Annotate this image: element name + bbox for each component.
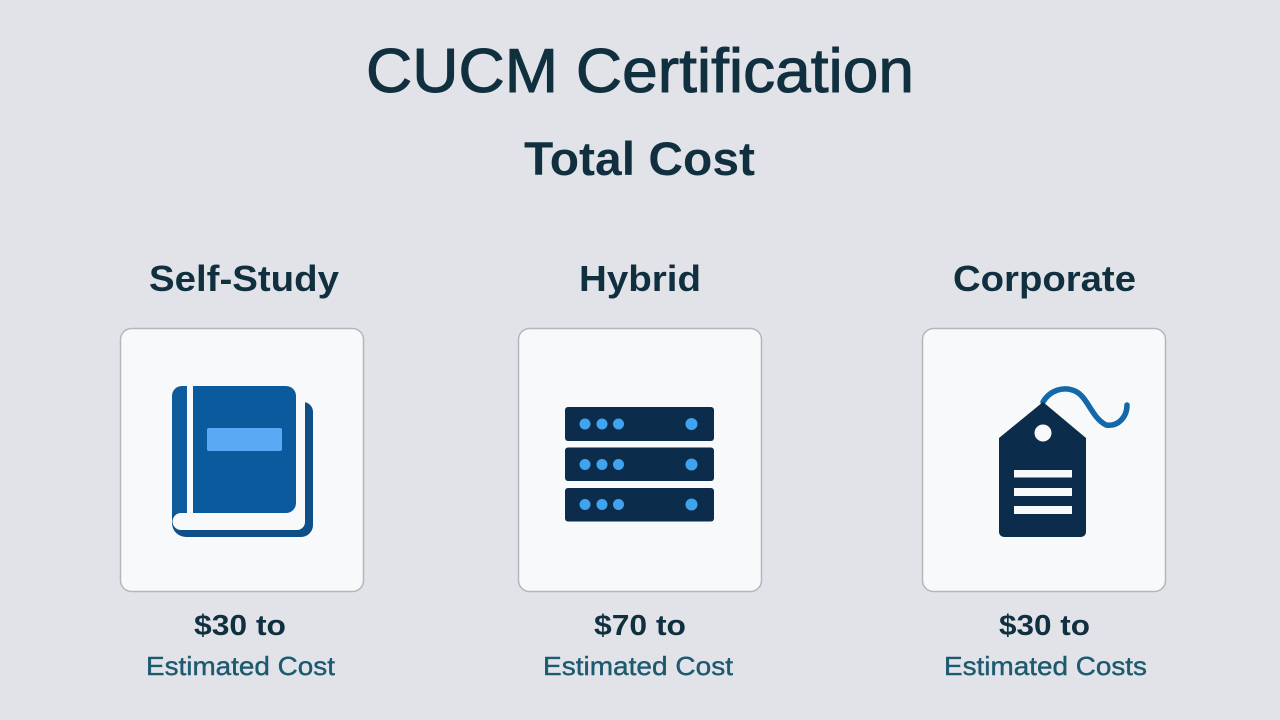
price: corporate: $30 to bbox=[999, 610, 1090, 642]
panel: hybrid bbox=[518, 258, 762, 681]
caption: hybrid: Estimated Cost bbox=[543, 651, 734, 681]
caption: self-study: Estimated Cost bbox=[146, 651, 336, 681]
panel: corporate bbox=[922, 258, 1166, 681]
heading: self-study: Self-Study bbox=[149, 258, 339, 299]
card: hybrid bbox=[518, 328, 762, 592]
card: corporate bbox=[922, 328, 1166, 592]
subtitle: Total Cost bbox=[524, 132, 755, 185]
title: CUCM Certification bbox=[366, 37, 914, 106]
heading: corporate: Corporate bbox=[953, 258, 1136, 299]
card: self-study bbox=[120, 328, 364, 592]
price: hybrid: $70 to bbox=[594, 610, 686, 642]
icon: book bbox=[172, 386, 313, 537]
heading: hybrid: Hybrid bbox=[579, 258, 701, 299]
price: self-study: $30 to bbox=[194, 610, 286, 642]
panel: self-study bbox=[120, 258, 364, 681]
icon: server rack bbox=[565, 407, 714, 522]
caption: corporate: Estimated Costs bbox=[944, 651, 1147, 681]
icon: price tag bbox=[999, 389, 1127, 537]
